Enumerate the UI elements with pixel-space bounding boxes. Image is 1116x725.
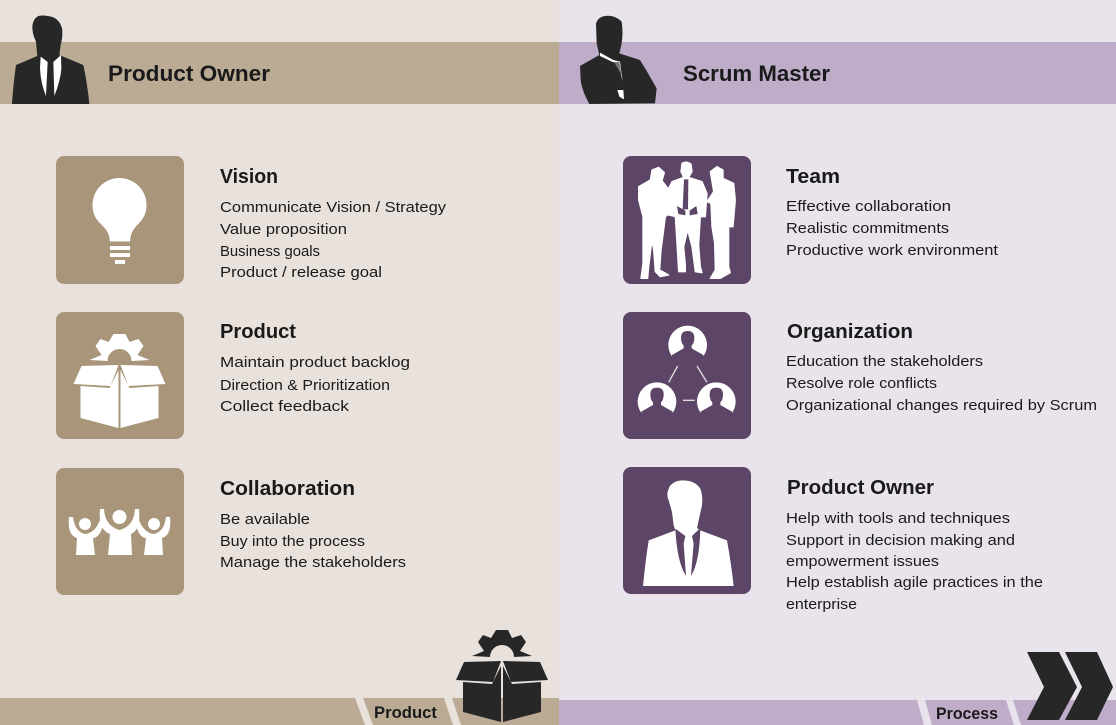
text: Vision: Vision: [220, 166, 278, 188]
text: Team: Realistic commitments: [786, 220, 949, 237]
text: Collaboration: Manage the stakeholders: [220, 554, 406, 571]
text: Organization: Resolve role conflicts: [786, 375, 937, 392]
text: Organization: Education the stakeholders: [786, 353, 983, 370]
text: Organization: Organizational changes required by Scrum: [786, 397, 1097, 414]
text: Vision: Business goals: [220, 243, 320, 260]
icon: light bulb: [56, 156, 184, 284]
text: Collaboration: Be available: [220, 511, 310, 528]
text: Collaboration: [220, 478, 406, 571]
heading: Product Owner: Product Owner: [108, 61, 270, 86]
icon: product owner silhouette: [12, 16, 89, 104]
footer band: Product: [0, 698, 559, 725]
text: Product Owner: Help with tools and techniques: [786, 510, 1010, 527]
icon: product box: [56, 312, 184, 439]
header band: Product Owner: [0, 16, 559, 104]
label: Process: Process: [936, 704, 998, 723]
text: Vision: Communicate Vision / Strategy: [220, 199, 447, 216]
text: Team: Effective collaboration: [786, 198, 951, 215]
icon: businessman: [623, 467, 751, 594]
icon: dark product box: [456, 630, 548, 722]
text: Product: Product: [220, 321, 296, 343]
text: Team: [786, 166, 999, 259]
card: Vision: [56, 156, 447, 284]
text: Team: Team: [786, 166, 840, 188]
text: Organization: [786, 321, 1097, 414]
text: Vision: [220, 166, 447, 281]
card: Product Owner: [623, 467, 1043, 613]
card: Product: [56, 312, 410, 439]
text: Product Owner: Support in decision making and: [786, 532, 1015, 549]
icon: cheering people: [56, 468, 184, 595]
heading: Scrum Master: Scrum Master: [683, 61, 830, 86]
icon: team silhouettes: [623, 156, 751, 284]
text: Product: Maintain product backlog: [220, 354, 410, 371]
text: Product Owner: Product Owner: [787, 477, 934, 499]
text: Product Owner: enterprise: [786, 596, 857, 613]
text: Product: [220, 321, 410, 415]
arrow: double chevron: [1027, 652, 1113, 720]
text: Team: Productive work environment: [786, 242, 999, 259]
card: Team: [623, 156, 999, 284]
card: Organization: [623, 312, 1097, 439]
text: Product Owner: empowerment issues: [786, 553, 939, 570]
text: Vision: Product / release goal: [220, 264, 382, 281]
footer band: Process: [559, 700, 1116, 725]
text: Collaboration: Collaboration: [220, 478, 355, 500]
label: Product: Product: [374, 703, 437, 722]
icon: connected people: [623, 312, 751, 439]
text: Organization: Organization: [787, 321, 913, 343]
text: Product Owner: [786, 477, 1043, 613]
icon: scrum master silhouette: [580, 16, 657, 104]
left panel background: [0, 0, 559, 725]
text: Product: Collect feedback: [220, 398, 350, 415]
card: Collaboration: [56, 468, 406, 595]
text: Product Owner: Help establish agile practices in the: [786, 574, 1043, 591]
text: Vision: Value proposition: [220, 221, 347, 238]
header band: Scrum Master: [559, 16, 1116, 104]
text: Collaboration: Buy into the process: [220, 533, 365, 550]
right panel background: [559, 0, 1116, 725]
text: Product: Direction & Prioritization: [220, 377, 390, 394]
